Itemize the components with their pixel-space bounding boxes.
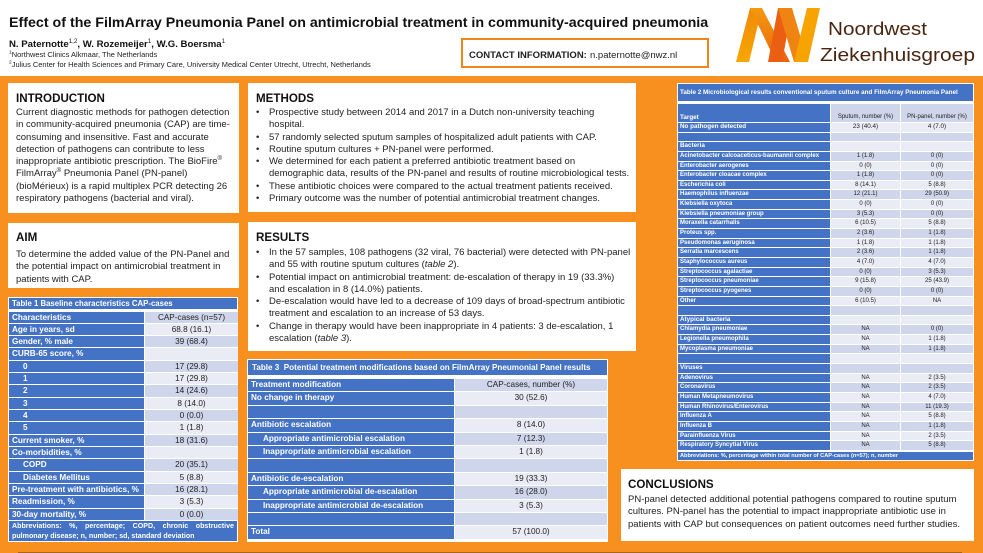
bullet list: results: Potential impact on antimicrobial treatment: de-escalation of therapy in 19 (33.3%)	[269, 272, 614, 283]
table 1 data: CURB-65 score, %	[12, 349, 83, 358]
table 3 data: 3 (5.3)	[519, 501, 543, 510]
table 2 data: NA	[861, 326, 870, 332]
table 2 data: Mycoplasma pneumoniae	[680, 346, 753, 352]
logo: Noordwest Ziekenhuisgroep	[736, 8, 975, 65]
table 1 data: 0 (0.0)	[180, 510, 203, 518]
text: aim: patients with CAP.	[16, 274, 92, 285]
table 1 title: Table 1 Baseline characteristics CAP-cases	[12, 299, 173, 308]
table 2 data: 4 (7.0)	[928, 259, 946, 265]
table 1 data: 8 (14.0)	[177, 399, 206, 408]
table 2 data: Other	[680, 298, 696, 304]
table 2 data: Atypical bacteria	[680, 316, 730, 323]
table 3 data: CAP-cases, number (%)	[487, 380, 575, 389]
table 2 data: 4 (7.0)	[857, 259, 874, 265]
table 1 data: Diabetes Mellitus	[23, 473, 90, 482]
text: introduction: (bioMérieux) is a rapid multiplex PCR detecting 26	[16, 181, 227, 192]
table 3 data: Antibiotic escalation	[251, 420, 331, 429]
table 3 data	[248, 379, 607, 539]
bullet list: methods: •	[256, 107, 259, 118]
table 2 data: 5 (8.8)	[928, 413, 946, 419]
table 2 data: NA	[861, 442, 870, 448]
table 2 data: Legionella pneumophila	[680, 336, 749, 342]
table 1 data: 18 (31.6)	[175, 436, 208, 445]
panel: methods	[248, 83, 636, 212]
panel: table 3 treatment modifications	[247, 359, 608, 542]
table 2 data: Haemophilus influenzae	[680, 191, 749, 197]
bullet list: results: •	[256, 296, 259, 307]
bullet list: results: Change in therapy would have been inappropriate in 4 patients: 3 de-escalation, 1	[269, 321, 613, 332]
table 2 data: NA	[861, 336, 870, 342]
table 2 data: 0 (0)	[931, 201, 943, 207]
table 2 data: Enterobacter aerogenes	[680, 163, 749, 169]
table 2 data: NA	[933, 298, 941, 304]
table 1 data: 3 (5.3)	[180, 497, 203, 506]
table 2 data: 1 (1.8)	[928, 346, 946, 352]
text: introduction: respiratory pathogens (bacterial and viral).	[16, 193, 194, 204]
bullet list: methods: These antibiotic choices were compared to the actual treatment patients received.	[269, 181, 613, 192]
table 2 data: Enterobacter cloacae complex	[680, 172, 767, 178]
table 2 abbreviations	[678, 452, 973, 460]
table 2 data: 0 (0)	[859, 163, 872, 169]
table 2 data: 0 (0)	[931, 172, 943, 178]
table 2 data: 0 (0)	[859, 269, 872, 275]
contact information box: n.paternotte@nwz.nl	[590, 50, 677, 61]
table 2 data: 5 (8.8)	[928, 220, 946, 226]
table 2 data: Streptococcus pyogenes	[680, 288, 751, 294]
table 2 data: 0 (0)	[931, 153, 943, 159]
table 2 data: 1 (1.8)	[928, 240, 946, 246]
table 1 data: Gender, % male	[12, 337, 73, 346]
bullet list: results: •	[256, 321, 259, 332]
table 2 data: 2 (3.6)	[857, 249, 874, 255]
table 2 data: NA	[861, 394, 870, 400]
table 1 data: Age in years, sd	[12, 325, 75, 334]
table 2 data: NA	[861, 384, 870, 390]
table 2 data: NA	[861, 404, 870, 410]
text: introduction: Current diagnostic methods for pathogen detection	[16, 107, 229, 118]
table 2 data: Streptococcus pneumoniae	[680, 278, 759, 284]
bullet list: results: In the 57 samples, 108 pathogens (32 viral, 76 bacterial) were detected with PN-panel	[269, 247, 630, 258]
heading: methods: METHODS	[256, 92, 314, 105]
table 2 data: 2 (3.5)	[928, 375, 946, 381]
table 3 data: 30 (52.6)	[515, 393, 547, 402]
panel: introduction	[8, 83, 239, 213]
table 2 data: Respiratory Syncytial Virus	[680, 442, 758, 448]
table 2 data: Adenovirus	[680, 375, 713, 381]
table 1 data: 5 (8.8)	[180, 473, 203, 482]
text: introduction	[16, 107, 230, 204]
table 2 data: Acinetobacter calcoaceticus-baumannii complex	[680, 153, 819, 159]
table 2 title: Table 2 Microbiological results conventional sputum culture and FilmArray Pneumonia Panel	[680, 89, 958, 96]
bullet list: results: escalation (table 3).	[269, 333, 352, 344]
text: aim: To determine the added value of the PN-Panel and	[16, 249, 229, 260]
table 3 data: Appropriate antimicrobial escalation	[263, 434, 405, 443]
table 3 data: 7 (12.3)	[517, 434, 545, 443]
table 2 data: 1 (1.8)	[857, 240, 874, 246]
table 2 data: NA	[861, 346, 870, 352]
bullet list: methods: We determined for each patient a preferred antibiotic treatment based on	[269, 156, 575, 167]
table 2 data: 29 (50.9)	[925, 191, 949, 197]
table 1 data: 39 (68.4)	[175, 337, 208, 346]
table 2 data: 5 (8.8)	[928, 442, 946, 448]
contact information box	[461, 38, 709, 68]
table 1 data: Current smoker, %	[12, 436, 84, 445]
table 2 data: PN-panel, number (%)	[907, 114, 967, 120]
table 2 data: NA	[861, 423, 870, 429]
table 1 data: 2	[23, 386, 28, 395]
table 2 data: Human Metapneumovirus	[680, 394, 753, 400]
text: introduction: inappropriate antibiotic prescription. The BioFire®	[16, 155, 222, 167]
panel: conclusions	[621, 469, 974, 541]
bullet list: methods: •	[256, 132, 259, 143]
table 2 data: Klebsiella oxytoca	[680, 201, 732, 207]
bullet list: results	[256, 247, 630, 344]
bullet list: methods	[256, 107, 629, 204]
table 1 data: 30-day mortality, %	[12, 510, 86, 518]
table 1 data: 68.8 (16.1)	[172, 325, 211, 334]
heading: introduction: INTRODUCTION	[16, 92, 105, 105]
table 2 data: 1 (1.8)	[928, 249, 946, 255]
table 1 data: Readmission, %	[12, 497, 75, 506]
table 3 data: Appropriate antimicrobial de-escalation	[263, 487, 417, 496]
authors: N. Paternotte1,2, W. Rozemeijer1, W.G. Boersma1	[9, 38, 225, 50]
bullet list: methods: Primary outcome was the number of potential antimicrobial treatment changes.	[269, 193, 600, 204]
bottom edge line	[18, 552, 962, 553]
table 1 data: 14 (24.6)	[175, 386, 208, 395]
table 2 data: Chlamydia pneumoniae	[680, 326, 747, 332]
table 2 data: Influenza B	[680, 423, 712, 429]
bullet list: results: •	[256, 247, 259, 258]
text: conclusions: PN-panel detected additional potential pathogens compared to routine sputum	[628, 494, 956, 505]
bullet list: results: De-escalation would have led to a decrease of 109 days of broad-spectrum antibiotic	[269, 296, 625, 307]
table 2 data: Pseudomonas aeruginosa	[680, 240, 755, 246]
table 3 data: Antibiotic de-escalation	[251, 474, 343, 483]
logo: Noordwest Ziekenhuisgroep: Ziekenhuisgroep	[820, 45, 975, 65]
table 2 data: Streptococcus agalactiae	[680, 269, 752, 275]
bullet list: methods: Prospective study between 2014 and 2017 in a Dutch non-university teaching	[269, 107, 594, 118]
table 3 data: Inappropriate antimicrobial escalation	[263, 447, 411, 456]
affiliations	[9, 50, 371, 69]
affiliations: 2Julius Center for Health Sciences and Primary Care, University Medical Center Utrecht, Utrecht, Netherlands	[9, 60, 371, 69]
table 2 data: 8 (14.1)	[855, 182, 876, 188]
table 3 data: 57 (100.0)	[512, 527, 550, 536]
table 1 data: CAP-cases (n=57)	[158, 312, 225, 322]
table 2 data: Moraxella catarrhalis	[680, 220, 740, 226]
table 3 title: Table 3 Potential treatment modifications based on FilmArray Pneumonial Panel results	[252, 363, 591, 372]
table 2 data: NA	[861, 432, 870, 438]
table 1 data: COPD	[23, 460, 47, 469]
table 2 data: 4 (7.0)	[928, 394, 946, 400]
table 2 data: 12 (21.1)	[853, 191, 878, 197]
table 2 data: Human Rhinovirus/Enterovirus	[680, 404, 768, 410]
table 2 data: Influenza A	[680, 413, 712, 419]
table 2 data: Viruses	[680, 364, 703, 371]
title: Effect of the FilmArray Pneumonia Panel on antimicrobial treatment in community-acquired pneumonia	[9, 15, 708, 31]
bullet list: methods: •	[256, 144, 259, 155]
logo: Noordwest Ziekenhuisgroep: Noordwest	[828, 19, 927, 39]
table 2 data: 0 (0)	[859, 288, 872, 294]
table 2 data: 1 (1.8)	[928, 230, 946, 236]
table 2 data: 25 (43.9)	[925, 278, 949, 284]
table 2 data: Parainfluenza Virus	[680, 432, 736, 438]
table 2 data: Sputum, number (%)	[838, 114, 893, 120]
table 3 data: 8 (14.0)	[517, 420, 545, 429]
text: aim: the potential impact on antimicrobial treatment in	[16, 261, 220, 272]
table 1 data: Characteristics	[12, 312, 71, 322]
bullet list: methods: •	[256, 156, 259, 167]
bullet list: methods: •	[256, 181, 259, 192]
table 3 data: Treatment modification	[251, 380, 341, 389]
table 2 data: 2 (3.6)	[857, 230, 874, 236]
table 3 data: 19 (33.3)	[515, 474, 547, 483]
table 2 data: 0 (0)	[931, 163, 943, 169]
heading: conclusions: CONCLUSIONS	[628, 478, 714, 491]
table 2 data: 9 (15.8)	[855, 278, 876, 284]
table 2 data	[678, 104, 973, 450]
bullet list: results: and escalation in 8 (14.0%) patients.	[269, 284, 423, 295]
table 3 data: Total	[251, 527, 270, 536]
bullet list: methods: •	[256, 193, 259, 204]
heading: results: RESULTS	[256, 231, 309, 244]
table 2 data: 0 (0)	[931, 288, 943, 294]
table 2 data: Klebsiella pneumoniae group	[680, 211, 764, 217]
table 2 data: NA	[861, 375, 870, 381]
table 1 data: 4	[23, 411, 28, 420]
bullet list: methods: 57 randomly selected sputum samples of hospitalized adult patients with CAP.	[269, 132, 597, 143]
table 3 data: 1 (1.8)	[519, 447, 543, 456]
table 2 data: 23 (40.4)	[853, 123, 878, 130]
heading: aim: AIM	[16, 231, 37, 244]
table 2 data: 11 (19.3)	[925, 404, 949, 410]
table 2 data: 4 (7.0)	[928, 123, 946, 130]
table 1 data: 16 (28.1)	[175, 485, 208, 494]
table 1 data: Co-morbidities, %	[12, 448, 82, 457]
table 2 data: 0 (0)	[859, 201, 872, 207]
table 2 data: 3 (5.3)	[857, 211, 874, 217]
table 2 abbreviations: Abbreviations: %, percentage within total number of CAP-cases (n=57); n, number	[680, 453, 898, 459]
table 1 data: Pre-treatment with antibiotics, %	[12, 485, 139, 494]
table 2 data: NA	[861, 413, 870, 419]
table 1 data: 17 (29.8)	[175, 374, 208, 383]
table 2 data: 0 (0)	[931, 211, 943, 217]
table 2 data: 6 (10.5)	[855, 298, 876, 304]
bullet list: methods: Routine sputum cultures + PN-panel were performed.	[269, 144, 494, 155]
table 1 data: 3	[23, 399, 28, 408]
bullet list: results: and 55 with routine sputum cultures (table 2).	[269, 259, 459, 270]
table 2 data: 1 (1.8)	[928, 336, 946, 342]
table 2 data: Escherichia coli	[680, 182, 726, 188]
table 2 data: 1 (1.8)	[857, 172, 874, 178]
table 1 data: 1 (1.8)	[180, 423, 203, 432]
table 2 data: Coronavirus	[680, 384, 715, 390]
table 2 data: 3 (5.3)	[928, 269, 946, 275]
table 2 data: 1 (1.8)	[857, 153, 874, 159]
panel: results	[248, 222, 636, 351]
table 1 data: 5	[23, 423, 28, 432]
table 1 data: 0	[23, 362, 28, 371]
table 2 data: 2 (3.5)	[928, 432, 946, 438]
table 3 title	[248, 360, 607, 375]
table 1 title	[9, 298, 237, 309]
panel: table 2 microbiological results	[677, 83, 974, 461]
table 3 data: Inappropriate antimicrobial de-escalation	[263, 501, 423, 510]
text: introduction: detection of pathogens can contribute to less	[16, 144, 205, 155]
table 3 data: No change in therapy	[251, 393, 334, 402]
bullet list: methods: demographic data, results of the PN-panel and results of routine microbiological tests.	[269, 168, 629, 179]
text: introduction: consuming and insensitive. Fast and accurate	[16, 132, 209, 143]
contact information box: CONTACT INFORMATION:	[469, 50, 587, 61]
text: introduction: in community-acquired pneumonia (CAP) are time-	[16, 119, 230, 130]
table 1 data	[9, 312, 238, 520]
table 2 data: No pathogen detected	[680, 123, 746, 130]
panel: aim	[8, 223, 239, 288]
table 1 data: 0 (0.0)	[180, 411, 203, 420]
table 2 data: Staphylococcus aureus	[680, 259, 747, 265]
bullet list: results: treatment and escalation to an increase of 53 days.	[269, 308, 484, 319]
table 2 data: 1 (1.8)	[928, 423, 946, 429]
table 1 data: 20 (35.1)	[175, 460, 208, 469]
panel: table 1 baseline characteristics	[8, 297, 238, 542]
table 2 data: Serratia marcescens	[680, 249, 739, 255]
bullet list: results: •	[256, 272, 259, 283]
table 1 data: 1	[23, 374, 28, 383]
text: introduction: FilmArray® Pneumonia Panel (PN-panel)	[16, 167, 187, 179]
table 2 data: Bacteria	[680, 142, 705, 149]
table 2 data: 6 (10.5)	[855, 220, 876, 226]
text: aim	[16, 249, 229, 285]
table 2 data: Proteus spp.	[680, 230, 716, 236]
text: conclusions: cultures. PN-panel has the potential to impact inappropriate antibiotic use in	[628, 506, 946, 517]
text: conclusions: patients with CAP but consequences on patient outcomes need further studies.	[628, 519, 960, 530]
table 3 data: 16 (28.0)	[515, 487, 547, 496]
table 1 abbreviations: Abbreviations: %, percentage; COPD, chronic obstructive pulmonary disease; n, number; sd, standard deviation	[12, 522, 234, 540]
text: conclusions	[628, 494, 960, 530]
table 2 data: 5 (8.8)	[928, 182, 946, 188]
table 2 title	[678, 84, 973, 101]
bullet list: methods: hospital.	[269, 119, 304, 130]
affiliations: 1Northwest Clinics Alkmaar, The Netherlands	[9, 50, 157, 59]
table 1 data: 17 (29.8)	[175, 362, 208, 371]
table 2 data: 0 (0)	[931, 326, 943, 332]
table 2 data: 2 (3.5)	[928, 384, 946, 390]
table 2 data: Target	[680, 114, 699, 121]
